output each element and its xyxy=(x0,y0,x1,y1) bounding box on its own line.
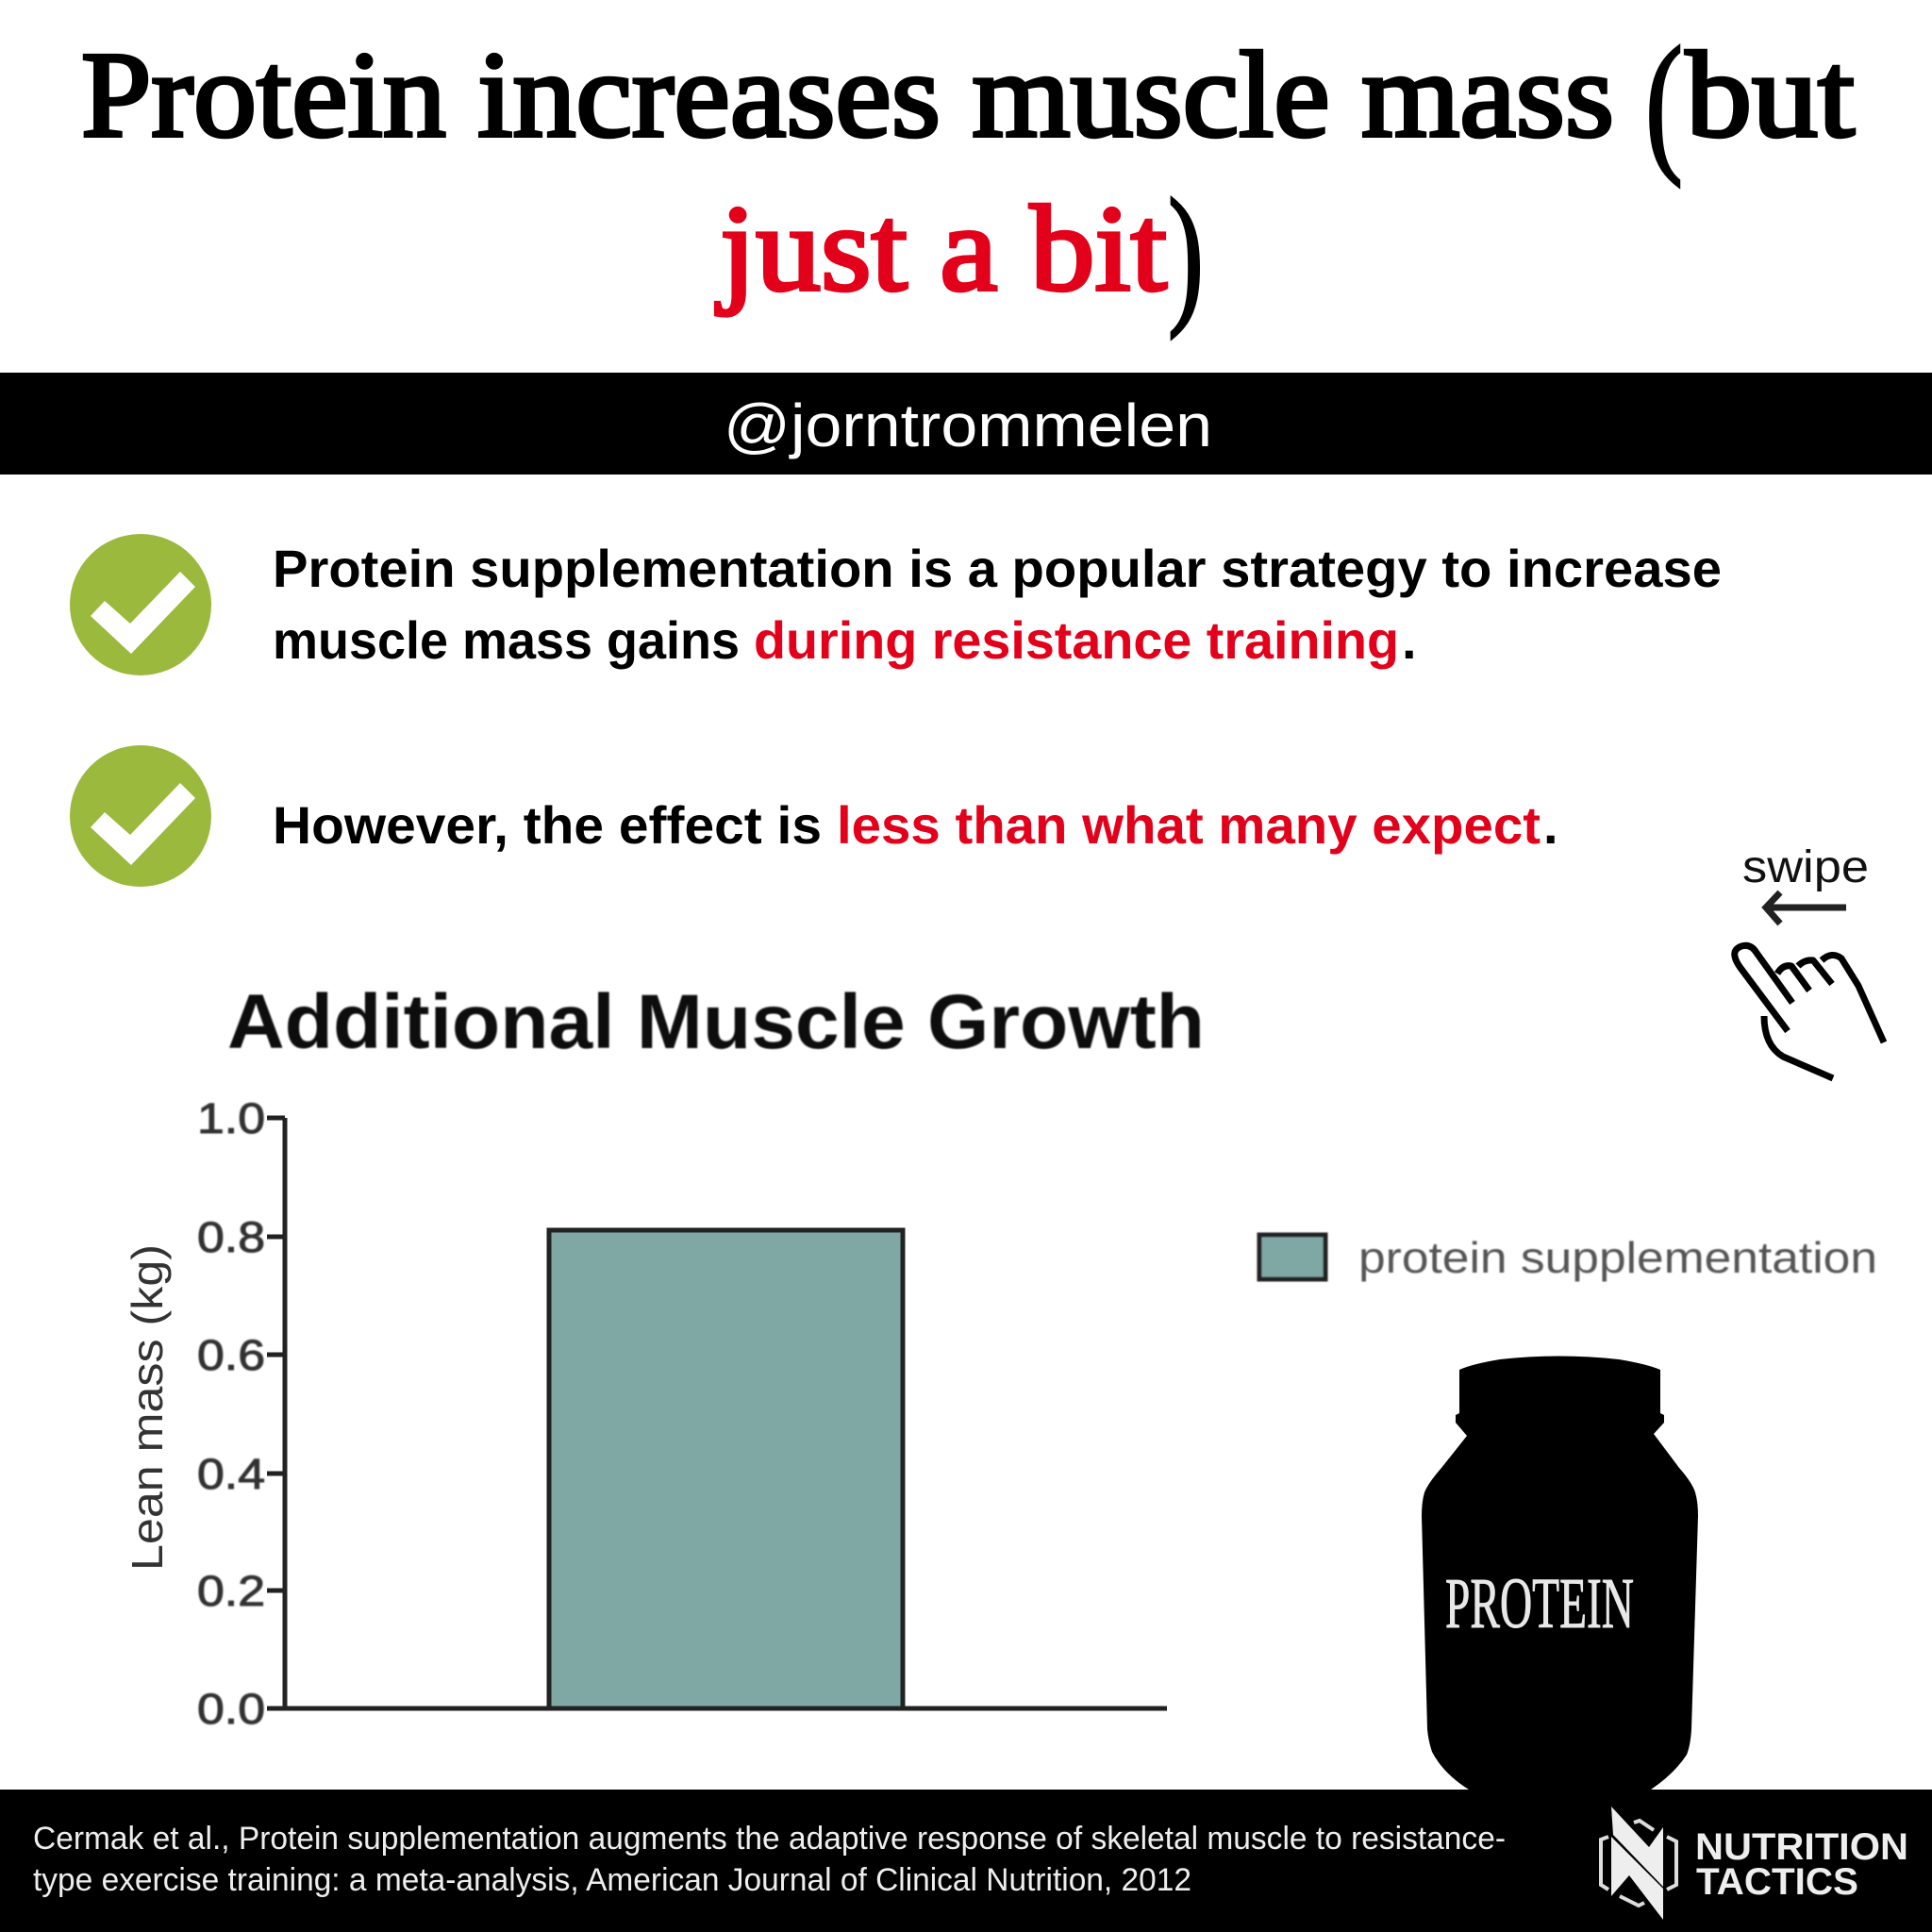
bullet 2 text: However, the effect is xyxy=(273,795,822,855)
chart axes xyxy=(267,1118,1167,1708)
y axis tick labels: 0.4 xyxy=(197,1450,265,1498)
y axis tick labels: 0.6 xyxy=(197,1331,265,1379)
icon: protein jar xyxy=(1422,1357,1698,1790)
y axis tick labels: 0.2 xyxy=(197,1567,265,1615)
bar: protein supplementation xyxy=(549,1230,903,1708)
bullet 2 text: less than what many expect xyxy=(837,795,1541,855)
legend: protein supplementation xyxy=(1358,1233,1877,1282)
icon: pointing hand xyxy=(1735,945,1884,1078)
title: ( xyxy=(1645,15,1683,188)
y axis tick labels xyxy=(197,1094,265,1733)
title xyxy=(81,15,1855,340)
swipe hint xyxy=(1735,842,1884,1078)
bar chart xyxy=(123,1094,1167,1733)
bullet 2 xyxy=(70,745,1558,887)
author handle bar: @jorntrommelen xyxy=(724,391,1212,459)
bullet 1 text: . xyxy=(1402,610,1417,670)
y axis tick labels: 0.8 xyxy=(197,1213,265,1261)
logo mark xyxy=(1601,1807,1676,1920)
title: Protein increases muscle mass xyxy=(81,27,1614,163)
y axis tick labels: 1.0 xyxy=(197,1094,265,1142)
author handle bar xyxy=(0,373,1932,475)
bullet 1 text: muscle mass gains xyxy=(273,610,740,670)
bullet 1 text: during resistance training xyxy=(754,610,1399,670)
logo wordmark: NUTRITION xyxy=(1695,1826,1908,1868)
icon: green check xyxy=(70,534,211,675)
icon: protein jar: PROTEIN xyxy=(1445,1564,1634,1643)
footer xyxy=(0,1790,1932,1932)
y axis label: Lean mass (kg) xyxy=(123,1244,172,1571)
title: ) xyxy=(1168,167,1204,340)
icon: green check xyxy=(70,745,211,887)
logo wordmark xyxy=(1695,1826,1908,1903)
citation xyxy=(33,1821,1506,1898)
y axis tick labels: 0.0 xyxy=(197,1685,265,1733)
logo wordmark: TACTICS xyxy=(1696,1861,1858,1903)
bullet 2 text xyxy=(273,795,1558,855)
bullet 1 text xyxy=(273,539,1722,670)
citation: type exercise training: a meta-analysis, American Journal of Clinical Nutrition, 2012 xyxy=(33,1862,1191,1898)
chart title: Additional Muscle Growth xyxy=(227,979,1205,1065)
bullet 1 text: Protein supplementation is a popular strategy to increase xyxy=(273,539,1722,598)
arrow: swipe left xyxy=(1766,892,1846,924)
citation: Cermak et al., Protein supplementation augments the adaptive response of skeletal muscle to resistance- xyxy=(33,1821,1506,1857)
swipe label: swipe xyxy=(1742,842,1869,892)
bullet 2 text: . xyxy=(1543,795,1558,855)
title: but xyxy=(1686,27,1855,163)
logo: Nutrition Tactics xyxy=(1601,1807,1908,1920)
title: just a bit xyxy=(716,181,1167,317)
bullet 1 xyxy=(70,534,1722,675)
